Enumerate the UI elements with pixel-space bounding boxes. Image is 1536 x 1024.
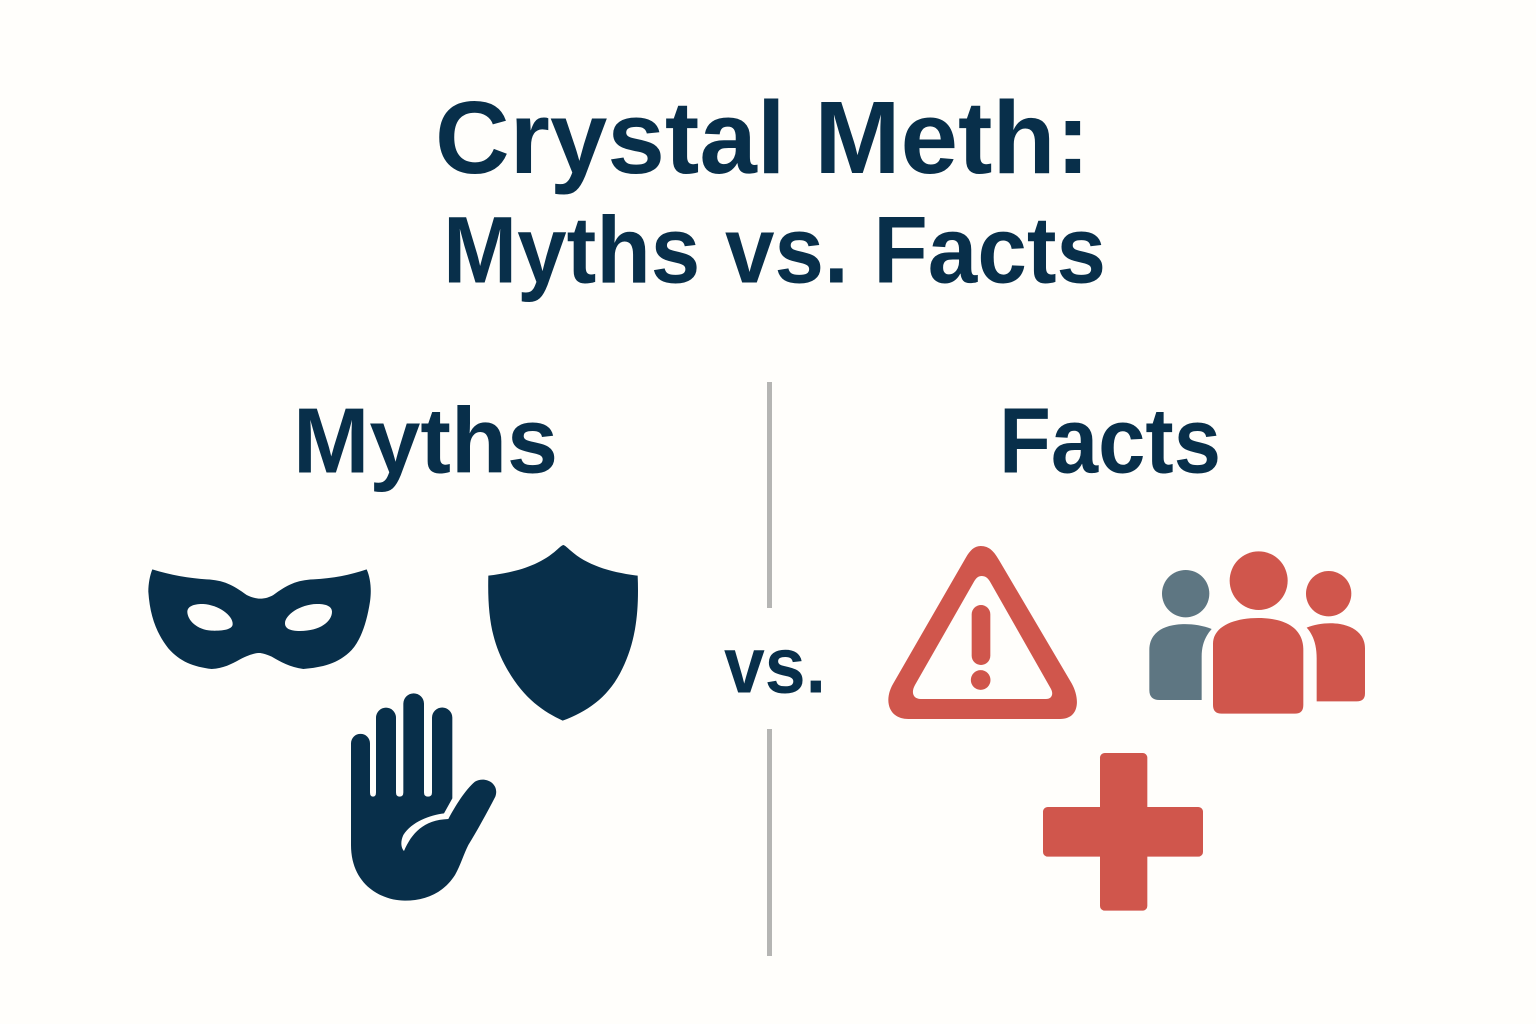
icon: medical cross [1043,753,1203,911]
heading: facts: Facts [999,388,1221,492]
heading: myths: Myths [293,388,558,492]
icon: warning triangle [888,546,1077,719]
title: Crystal Meth: [435,80,1090,195]
icon: mask [148,569,371,669]
panel: myths [148,388,638,901]
icon: raised hand [351,693,496,901]
title [435,80,1106,304]
divider with vs. label: vs. [724,620,826,710]
divider with vs. label [724,382,826,956]
panel: facts [888,388,1365,911]
icon: group of people [1149,551,1365,714]
icon: shield [488,545,638,721]
title: Myths vs. Facts [443,198,1106,304]
